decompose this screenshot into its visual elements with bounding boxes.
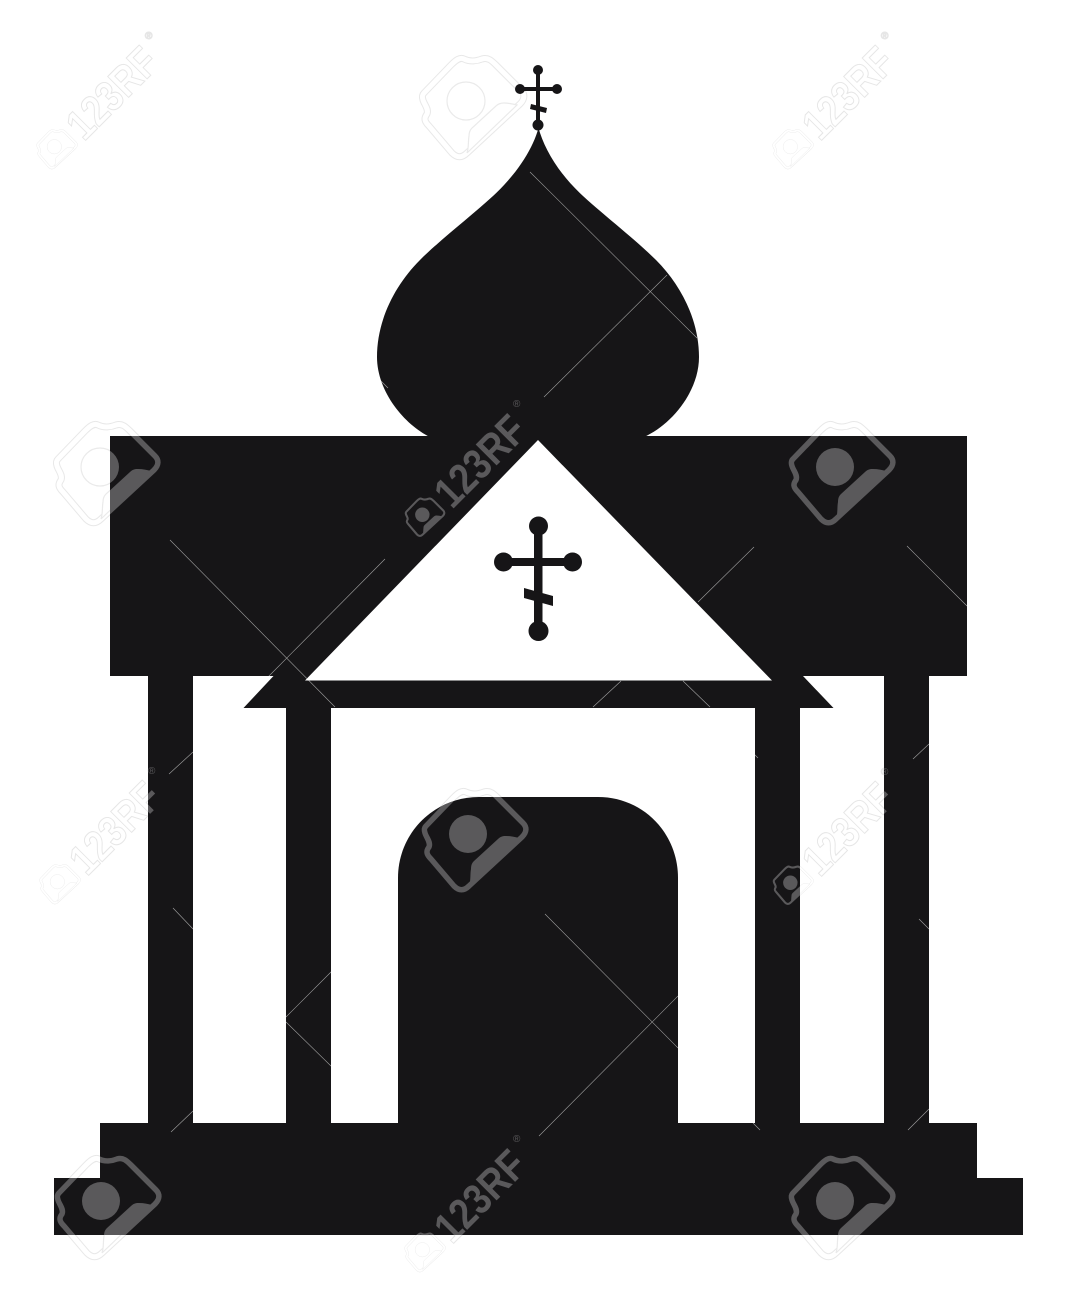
watermarks on white areas: 123RF <box>60 773 171 884</box>
top cross <box>515 65 562 130</box>
gable cross <box>494 516 582 641</box>
watermarks on black areas: 123RF <box>60 773 171 884</box>
watermarks on white areas: ® <box>881 31 889 42</box>
white gable triangle <box>305 440 772 680</box>
watermarks on black areas: 123RF <box>425 406 536 517</box>
watermarks on black areas <box>41 399 904 1271</box>
watermarks on black areas: 123RF <box>793 774 904 885</box>
watermarks on white areas: ® <box>881 767 889 778</box>
watermarks on white areas: 123RF <box>793 38 904 149</box>
watermarks on white areas: ® <box>513 1134 521 1145</box>
watermarks on white areas: 123RF <box>793 774 904 885</box>
watermarks on black areas: 123RF <box>425 1141 536 1252</box>
watermarks on white areas: ® <box>148 766 156 777</box>
watermarks on white areas: 123RF <box>57 38 168 149</box>
watermarks on white areas: ® <box>145 31 153 42</box>
watermarks on black areas: ® <box>513 399 521 410</box>
watermarks on black areas: ® <box>513 1134 521 1145</box>
roof block <box>110 436 967 676</box>
gable lintel with wings <box>244 676 834 708</box>
watermarks on white areas <box>38 31 904 1271</box>
watermarks on white areas: 123RF <box>425 406 536 517</box>
inner right pillar <box>755 708 800 1123</box>
arched doorway <box>398 797 678 1123</box>
lower step <box>54 1178 1023 1235</box>
inner left pillar <box>286 708 331 1123</box>
watermarks on black areas: ® <box>881 767 889 778</box>
watermarks on white areas: 123RF <box>425 1141 536 1252</box>
upper step <box>100 1123 977 1178</box>
onion dome <box>377 128 699 437</box>
outer left pillar <box>148 676 193 1123</box>
watermarks on white areas: ® <box>513 399 521 410</box>
outer right pillar <box>884 676 929 1123</box>
watermarks on black areas: ® <box>148 766 156 777</box>
